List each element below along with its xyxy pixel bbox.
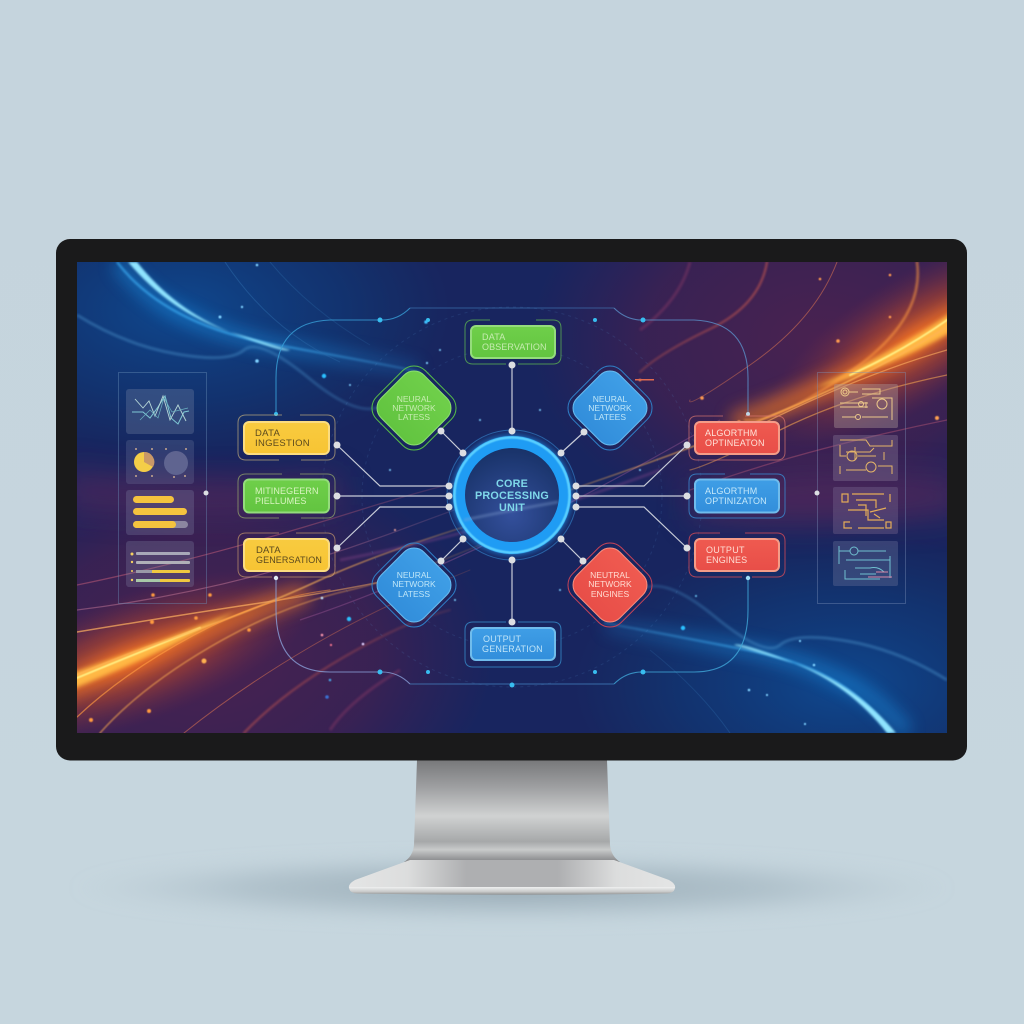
circuit card 4 [833,541,898,586]
particles [89,264,939,725]
diamond: neural network blue bottom: LATESS [398,589,430,599]
node: output engines: ENGINES [706,555,747,565]
node: data ingestion: DATA [255,428,280,439]
frame top [410,307,614,309]
blue light streaks top left [77,262,420,409]
frame top right [614,308,748,414]
diamond: neural network green [365,359,463,457]
node: data generation: GENERSATION [256,555,322,565]
core glow [457,440,567,550]
node: pipelines: MITINEGEERN [255,486,319,496]
stand neck [404,760,620,862]
stand base [349,860,675,888]
node: output generation: GENERATION [482,644,543,654]
faint orbit arcs [322,307,702,687]
monitor bezel [56,239,967,760]
frame bottom left [276,578,410,684]
diamond: neural network green: NEURAL [397,394,432,404]
panel outline [118,372,206,604]
circuit card 2 [833,435,898,481]
chart card: pie charts [126,440,194,484]
diamond: neural network blue top: LATEES [594,412,626,422]
bright ring [459,442,565,548]
node: algorithm optimization blue: OPTINIZATON [705,496,767,506]
node: algorithm optimization red: OPTINEATON [705,438,765,448]
left dashboard panel [118,372,206,604]
diamond: neural network red: NEUTRAL [590,570,630,580]
node: data ingestion [238,415,335,460]
orange light streaks top right [570,262,947,491]
chart card: yellow bars [126,490,194,535]
node: output generation [465,622,561,667]
node: algorithm optimization red [689,416,785,460]
node: output generation: OUTPUT [483,634,522,644]
frame dots [274,318,750,688]
frame bottom [410,683,614,685]
node: output engines [689,533,785,577]
node: data observation [465,320,561,364]
right circuit panel [818,372,906,604]
core processing unit [447,430,577,560]
node: pipelines: PIELLUMES [255,496,306,506]
circuit card 1 [834,384,898,428]
frame top left [276,308,410,414]
floor shadow [72,854,952,922]
core processing unit: UNIT [499,502,525,514]
node: pipelines [238,474,335,518]
monitor stand [349,760,675,895]
node: algorithm optimization red: ALGORTHM [705,428,757,438]
diamond: neural network blue top: NETWORK [588,403,632,413]
diamond: neural network blue top [561,359,659,457]
chart card: progress lines [126,541,194,587]
orange light streaks bottom left [77,482,481,733]
node: algorithm optimization blue [689,474,785,518]
outer faint ring [447,430,577,560]
node: output engines: OUTPUT [706,545,745,555]
node: data ingestion: INGESTION [255,438,310,449]
diamond: neural network green: LATESS [398,412,430,422]
diamond: neural network blue bottom: NEURAL [397,570,432,580]
screen background [77,262,947,733]
node: data observation: DATA [482,332,505,342]
central faint diagonal streaks [300,262,720,730]
diamond: neural network blue top: NEURAL [593,394,628,404]
node: data generation: DATA [256,545,281,556]
diamond: neural network blue bottom: NETWORK [392,579,436,589]
node: data generation [238,533,335,577]
diamond: neural network red: ENGINES [591,589,629,599]
circuit frame outline [276,308,748,684]
frame bottom right [614,578,748,684]
panel outline [818,372,906,604]
diamond: neural network red: NETWORK [588,579,632,589]
core disc [464,447,560,543]
stand base edge [349,887,675,895]
monitor screen [77,262,947,733]
chart card: line chart [126,389,194,434]
node: algorithm optimization blue: ALGORTHM [705,486,757,496]
core label: CORE [496,478,528,490]
diamond: neural network blue bottom [365,536,463,634]
core sheen [464,502,558,520]
connector nodes [204,362,820,626]
diamond: neural network red [561,536,659,634]
circuit card 3 [833,487,898,534]
small red dash accent [635,379,654,380]
blue light streaks bottom right [604,586,947,733]
core processing unit: PROCESSING [475,490,549,502]
diamond: neural network green: NETWORK [392,403,436,413]
connector lines [337,365,687,622]
node: data observation: OBSERVATION [482,342,547,352]
